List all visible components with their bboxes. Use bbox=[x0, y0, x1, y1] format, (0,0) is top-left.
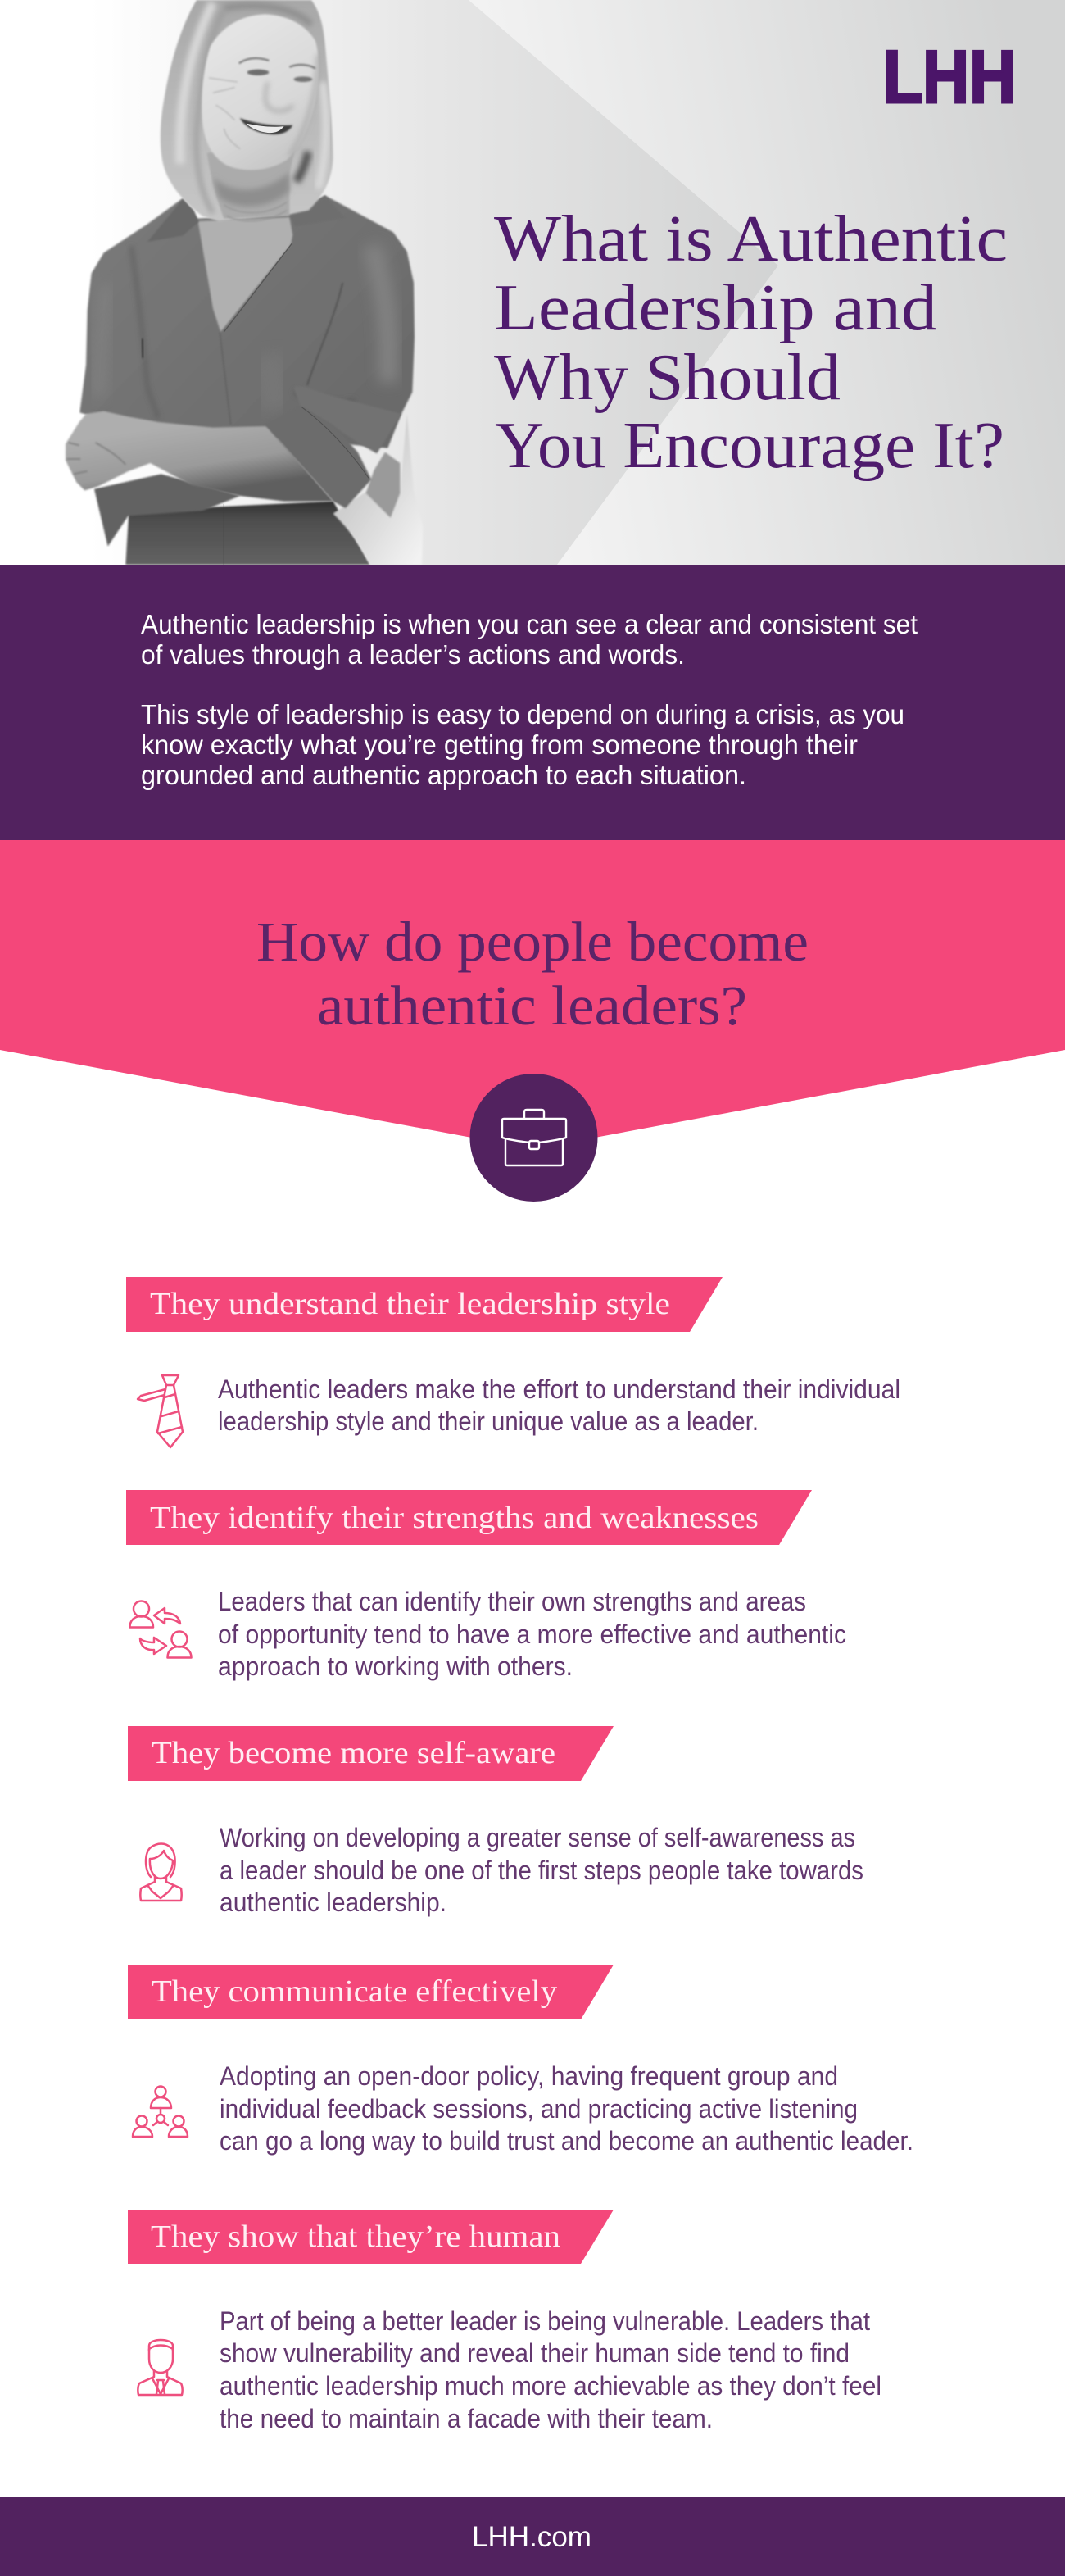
title: Why Should bbox=[494, 340, 841, 414]
banner bbox=[128, 1726, 614, 1781]
body text bbox=[218, 1587, 846, 1681]
banner bbox=[126, 1490, 812, 1545]
title: You Encourage It? bbox=[495, 408, 1004, 482]
body text: Part of being a better leader is being vulnerable. Leaders that bbox=[220, 2306, 870, 2336]
intro text: This style of leadership is easy to depend on during a crisis, as you bbox=[141, 699, 904, 729]
body text bbox=[218, 1374, 900, 1436]
intro text: Authentic leadership is when you can see a clear and consistent set bbox=[141, 609, 918, 639]
footer: LHH.com bbox=[472, 2521, 591, 2553]
body text: Working on developing a greater sense of self-awareness as bbox=[220, 1823, 855, 1852]
icon: briefcase in circle bbox=[470, 1074, 598, 1202]
chest bbox=[198, 217, 292, 332]
logo: LHH: LHH bbox=[883, 36, 1016, 119]
hero panel bbox=[0, 0, 1065, 565]
icon: two people exchanging bbox=[129, 1601, 192, 1657]
icon: woman bbox=[140, 1844, 182, 1901]
item 1: leadership style bbox=[126, 1277, 900, 1447]
section heading: authentic leaders? bbox=[317, 975, 747, 1037]
shirt torso and sleeves bbox=[79, 195, 415, 448]
body text: Authentic leaders make the effort to understand their individual bbox=[218, 1374, 900, 1404]
skirt and lower shirt bbox=[125, 502, 370, 565]
hand behind elbow bbox=[366, 452, 400, 518]
intro text: know exactly what you’re getting from someone through their bbox=[141, 729, 858, 760]
body text: the need to maintain a facade with their team. bbox=[220, 2404, 713, 2433]
banner: They show that they’re human bbox=[151, 2219, 560, 2254]
brows and eyes bbox=[239, 58, 315, 68]
item 4: communicate effectively bbox=[128, 1965, 913, 2156]
body text bbox=[220, 1823, 863, 1917]
intro text: of values through a leader’s actions and words. bbox=[141, 639, 685, 670]
collar bbox=[147, 199, 199, 242]
paper sheet bbox=[333, 414, 423, 565]
body text: can go a long way to build trust and become an authentic leader. bbox=[220, 2126, 913, 2156]
neck bbox=[207, 142, 297, 219]
body text bbox=[220, 2306, 881, 2433]
puffed sleeve gather bbox=[293, 386, 401, 453]
panel: how do people become authentic leaders bbox=[0, 840, 1065, 1202]
banner bbox=[126, 1277, 723, 1332]
body text: Adopting an open-door policy, having frequent group and bbox=[220, 2061, 838, 2091]
icon: necktie bbox=[138, 1375, 183, 1447]
body text: approach to working with others. bbox=[218, 1651, 573, 1681]
footer bbox=[0, 2497, 1065, 2576]
body text: authentic leadership. bbox=[220, 1888, 446, 1917]
title: Leadership and bbox=[494, 270, 937, 344]
forearm and fist bbox=[66, 411, 333, 502]
smile bbox=[240, 118, 292, 134]
body text: of opportunity tend to have a more effective and authentic bbox=[218, 1620, 846, 1649]
section heading: How do people become bbox=[256, 911, 809, 973]
intro text: grounded and authentic approach to each situation. bbox=[141, 760, 746, 790]
banner bbox=[128, 1965, 614, 2019]
banner: They understand their leadership style bbox=[150, 1287, 670, 1321]
banner bbox=[128, 2210, 614, 2264]
item 5: show they are human bbox=[128, 2210, 881, 2433]
nose bbox=[265, 82, 293, 111]
hair bbox=[161, 0, 333, 221]
body text: authentic leadership much more achievable as they don’t feel bbox=[220, 2371, 881, 2401]
banner: They identify their strengths and weaknesses bbox=[150, 1501, 759, 1535]
body text bbox=[220, 2061, 913, 2156]
body text: show vulnerability and reveal their human side tend to find bbox=[220, 2338, 850, 2368]
title: What is Authentic bbox=[494, 202, 1008, 275]
wrinkles bbox=[209, 78, 240, 149]
face bbox=[202, 14, 319, 170]
body text: leadership style and their unique value as a leader. bbox=[218, 1406, 759, 1436]
icon: man in suit bbox=[138, 2340, 183, 2395]
body text: Leaders that can identify their own strengths and areas bbox=[218, 1587, 806, 1616]
body text: individual feedback sessions, and practicing active listening bbox=[220, 2094, 858, 2124]
item 3: self-aware bbox=[128, 1726, 863, 1917]
photo: smiling woman with folded arms bbox=[66, 0, 423, 565]
title bbox=[494, 202, 1008, 482]
rolled cuff bbox=[265, 406, 371, 508]
panel: introduction bbox=[0, 565, 1065, 840]
item 2: strengths and weaknesses bbox=[126, 1490, 846, 1681]
body text: a leader should be one of the first steps people take towards bbox=[220, 1856, 863, 1885]
section heading bbox=[256, 911, 809, 1037]
left sleeve and lower arm bbox=[94, 474, 240, 547]
banner: They become more self-aware bbox=[152, 1736, 555, 1770]
icon: group network bbox=[133, 2087, 188, 2137]
banner: They communicate effectively bbox=[152, 1974, 557, 2009]
intro text bbox=[141, 609, 918, 790]
